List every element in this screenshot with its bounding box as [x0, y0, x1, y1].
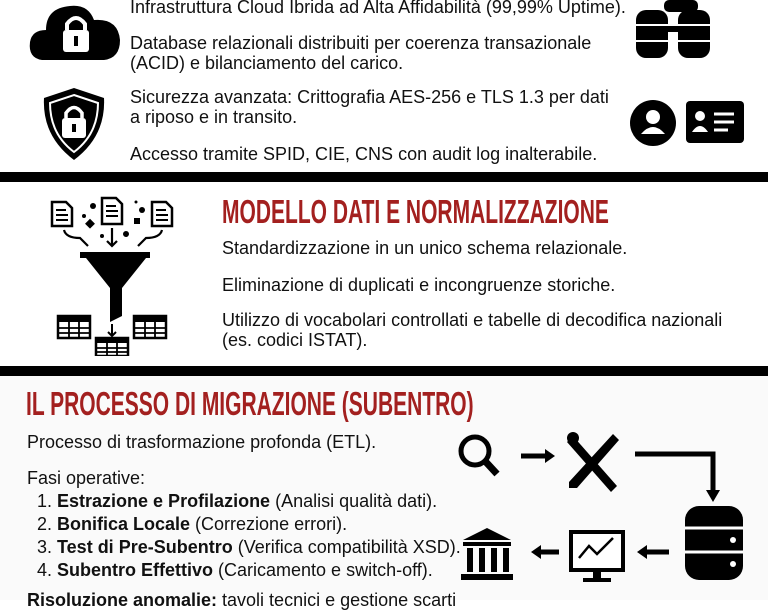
panel: data model: (es. codici ISTAT). — [222, 330, 367, 350]
text: phases — [27, 468, 461, 580]
heading: modello dati: MODELLO DATI E NORMALIZZAZIONE — [222, 194, 609, 231]
icon: cloud lock — [30, 6, 120, 60]
text: security — [130, 87, 609, 127]
panel: data model: Utilizzo di vocabolari controllati e tabelle di decodifica nazionali — [222, 310, 722, 330]
text: database: Database relazionali distribuiti per coerenza transazionale — [130, 33, 591, 53]
text: database: (ACID) e bilanciamento del carico. — [130, 53, 403, 73]
panel: data model — [50, 194, 722, 356]
text: security: Sicurezza avanzata: Crittografia AES-256 e TLS 1.3 per dati — [130, 87, 609, 107]
text: phases: 2. Bonifica Locale (Correzione errori). — [37, 514, 347, 534]
text: phases: 3. Test di Pre-Subentro (Verifica compatibilità XSD). — [37, 537, 461, 557]
text: phases: 1. Estrazione e Profilazione (Analisi qualità dati). — [37, 491, 437, 511]
panel: migration process — [0, 376, 768, 600]
panel: data model: Eliminazione di duplicati e incongruenze storiche. — [222, 275, 615, 295]
icon: user and id card — [630, 100, 744, 146]
text: access: Accesso tramite SPID, CIE, CNS con audit log inalterabile. — [130, 144, 597, 164]
icon: shield lock — [44, 88, 104, 160]
text: cut-off: Risoluzione anomalie: tavoli tecnici e gestione scarti — [27, 590, 456, 610]
text: phases: 4. Subentro Effettivo (Caricamento e switch-off). — [37, 560, 433, 580]
icon: funnel — [50, 196, 174, 356]
text: intro: Processo di trasformazione profonda (ETL). — [27, 432, 376, 452]
icon: database cluster — [636, 0, 710, 58]
panel: infrastructure — [30, 0, 744, 164]
diagram: process flow — [458, 432, 743, 582]
text: points: Standardizzazione in un unico schema relazionale. — [222, 238, 627, 258]
text: security: a riposo e in transito. — [130, 107, 297, 127]
text: phases: Fasi operative: — [27, 468, 145, 488]
text: database — [130, 33, 591, 73]
heading: processo: IL PROCESSO DI MIGRAZIONE (SUBENTRO) — [26, 386, 474, 423]
